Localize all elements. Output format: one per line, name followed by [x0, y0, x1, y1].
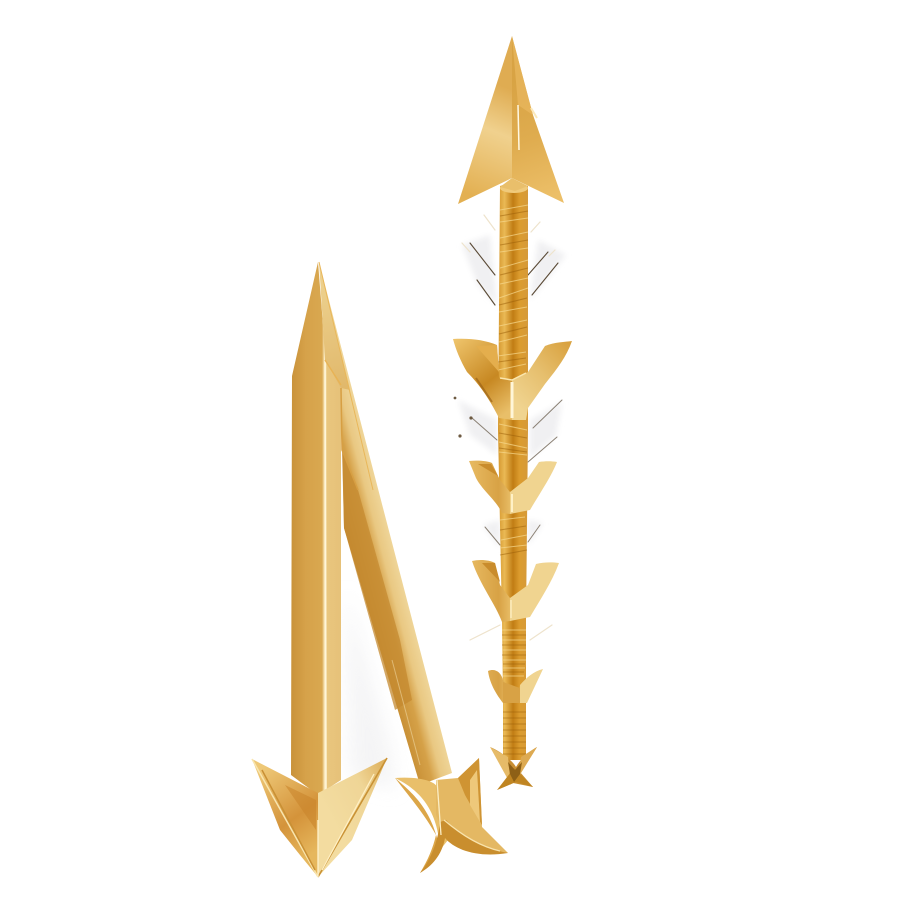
- left arrow: [252, 262, 508, 877]
- arrow tip facet: [319, 262, 373, 490]
- shaft: [498, 182, 528, 760]
- right arrow: [453, 36, 572, 790]
- diagonal shaft: [319, 262, 452, 785]
- fin 1: [453, 339, 572, 420]
- fin 3: [472, 560, 559, 622]
- arrow base: [490, 747, 537, 790]
- flared fletching: [395, 758, 508, 873]
- arrow head: [458, 36, 564, 204]
- fin 2: [469, 461, 557, 514]
- left arrow head: [252, 758, 387, 877]
- vertical shaft: [291, 262, 341, 795]
- feathers: [454, 215, 566, 640]
- fin 4: [488, 669, 543, 703]
- soft shadow between arrows: [346, 590, 395, 790]
